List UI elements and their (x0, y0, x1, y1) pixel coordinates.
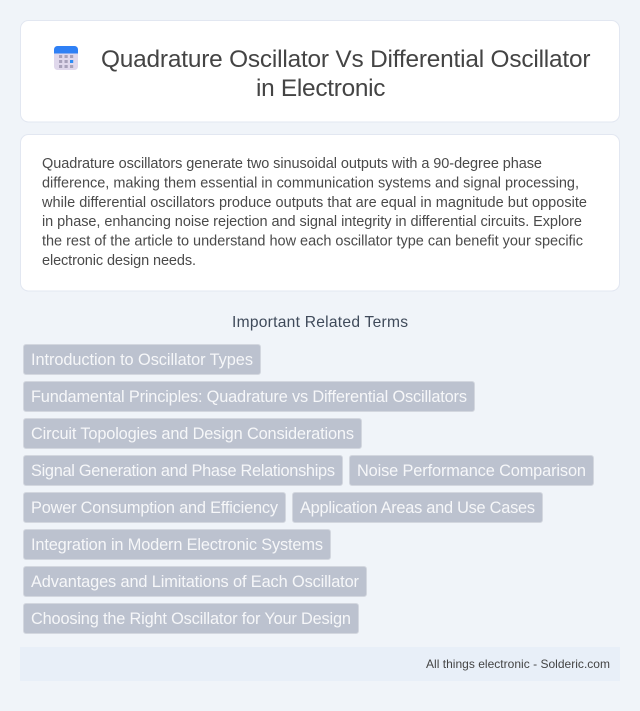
panel: title card (20, 20, 620, 122)
tag (292, 492, 542, 522)
text block: intro: electronic design needs. (42, 253, 196, 269)
tag: Choosing the Right Oscillator for Your Design (31, 610, 351, 628)
tag: Signal Generation and Phase Relationships (31, 462, 335, 480)
tag: Integration in Modern Electronic Systems (31, 536, 323, 554)
tag: Circuit Topologies and Design Considerations (31, 425, 354, 443)
text block: intro: the rest of the article to understand how each oscillator type can benefit your specific (42, 234, 583, 250)
title: Quadrature Oscillator Vs Differential Oscillator (101, 46, 590, 73)
tag: Introduction to Oscillator Types (31, 351, 253, 369)
title: in Electronic (256, 75, 386, 102)
tag: Fundamental Principles: Quadrature vs Differential Oscillators (31, 388, 467, 406)
tag: Power Consumption and Efficiency (31, 499, 279, 517)
tag (24, 344, 260, 374)
tag (350, 456, 594, 486)
tag (24, 530, 330, 560)
tag (24, 492, 286, 522)
footer: All things electronic - Solderic.com (426, 657, 610, 671)
panel: intro paragraph (20, 134, 620, 291)
heading: related terms: Important Related Terms (232, 314, 408, 331)
tag: Application Areas and Use Cases (300, 499, 535, 517)
tag (24, 382, 474, 412)
text block: intro: difference, making them essential in communication systems and signal processing, (42, 176, 579, 192)
text block: intro: while differential oscillators produce outputs that are equal in magnitude but opposite (41, 195, 587, 211)
text block: intro: in phase, enhancing noise rejection and signal integrity in differential circuits. Explore (42, 214, 582, 230)
tag (24, 456, 342, 486)
tag (24, 418, 362, 448)
footer (20, 647, 620, 681)
text block: intro: Quadrature oscillators generate two sinusoidal outputs with a 90-degree phase (42, 156, 542, 172)
tag: Advantages and Limitations of Each Oscillator (31, 573, 360, 591)
tag: Noise Performance Comparison (357, 462, 586, 480)
title (101, 46, 590, 102)
tag (24, 604, 358, 634)
tag list (24, 344, 594, 634)
icon: calendar (54, 46, 78, 70)
tag (24, 566, 366, 596)
text block: intro (41, 156, 587, 269)
